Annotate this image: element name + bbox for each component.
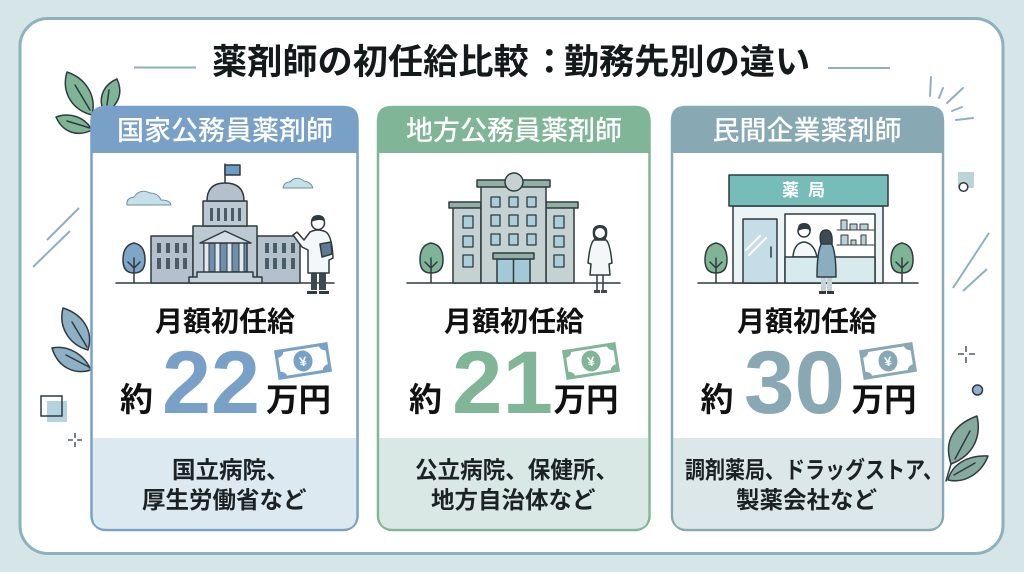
salary: about 220,000 yen: 22 (162, 332, 260, 432)
salary: about 210,000 yen: 21 (452, 332, 553, 432)
panel: private company pharmacist (671, 106, 944, 530)
workplace examples: 地方自治体など (431, 487, 596, 513)
salary: about 300,000 yen: 万円 (851, 382, 917, 418)
salary: about 210,000 yen: 万円 (553, 382, 619, 418)
icon: banknote (859, 342, 917, 380)
heading: 国家公務員薬剤師 (117, 116, 333, 146)
salary: about 220,000 yen (120, 332, 331, 432)
icon: banknote: ¥ (883, 353, 894, 369)
workplace examples: 国立病院、 (172, 457, 290, 483)
workplace examples (142, 457, 307, 513)
workplace examples: 公立病院、保健所、 (415, 457, 618, 483)
heading: 民間企業薬剤師 (712, 116, 902, 146)
icon: banknote (562, 342, 620, 380)
label: monthly starting salary: 月額初任給 (737, 306, 877, 337)
salary: about 300,000 yen (700, 332, 917, 432)
workplace examples: 厚生労働省など (142, 487, 307, 513)
illustration: government building and pharmacist (116, 164, 334, 294)
salary: about 210,000 yen (409, 332, 619, 432)
illustration: pharmacy storefront: 薬局 (782, 181, 834, 200)
icon: banknote (274, 342, 332, 380)
salary: about 300,000 yen: 30 (744, 332, 845, 432)
salary: about 220,000 yen: 万円 (266, 382, 331, 418)
label: monthly starting salary: 月額初任給 (155, 306, 295, 337)
salary: about 300,000 yen: 約 (700, 381, 734, 418)
label: monthly starting salary: 月額初任給 (444, 306, 584, 337)
workplace examples (415, 457, 618, 513)
decorations: right (930, 77, 989, 481)
workplace examples: 製薬会社など (736, 487, 877, 513)
workplace examples: 調剤薬局、ドラッグストア、 (685, 456, 943, 483)
icon: banknote: ¥ (298, 353, 309, 369)
illustration: municipal hospital and pharmacist (407, 173, 620, 293)
icon: banknote: ¥ (586, 353, 597, 369)
illustration: pharmacy storefront (698, 175, 918, 294)
decorations: left (33, 72, 120, 447)
title: 薬剤師の初任給比較：勤務先別の違い (212, 43, 810, 82)
workplace examples (685, 456, 943, 513)
heading: 地方公務員薬剤師 (406, 116, 622, 146)
panel: national public servant pharmacist (90, 106, 358, 530)
salary: about 220,000 yen: 約 (120, 381, 153, 418)
salary: about 210,000 yen: 約 (409, 381, 442, 418)
panel: local public servant pharmacist (377, 106, 650, 530)
